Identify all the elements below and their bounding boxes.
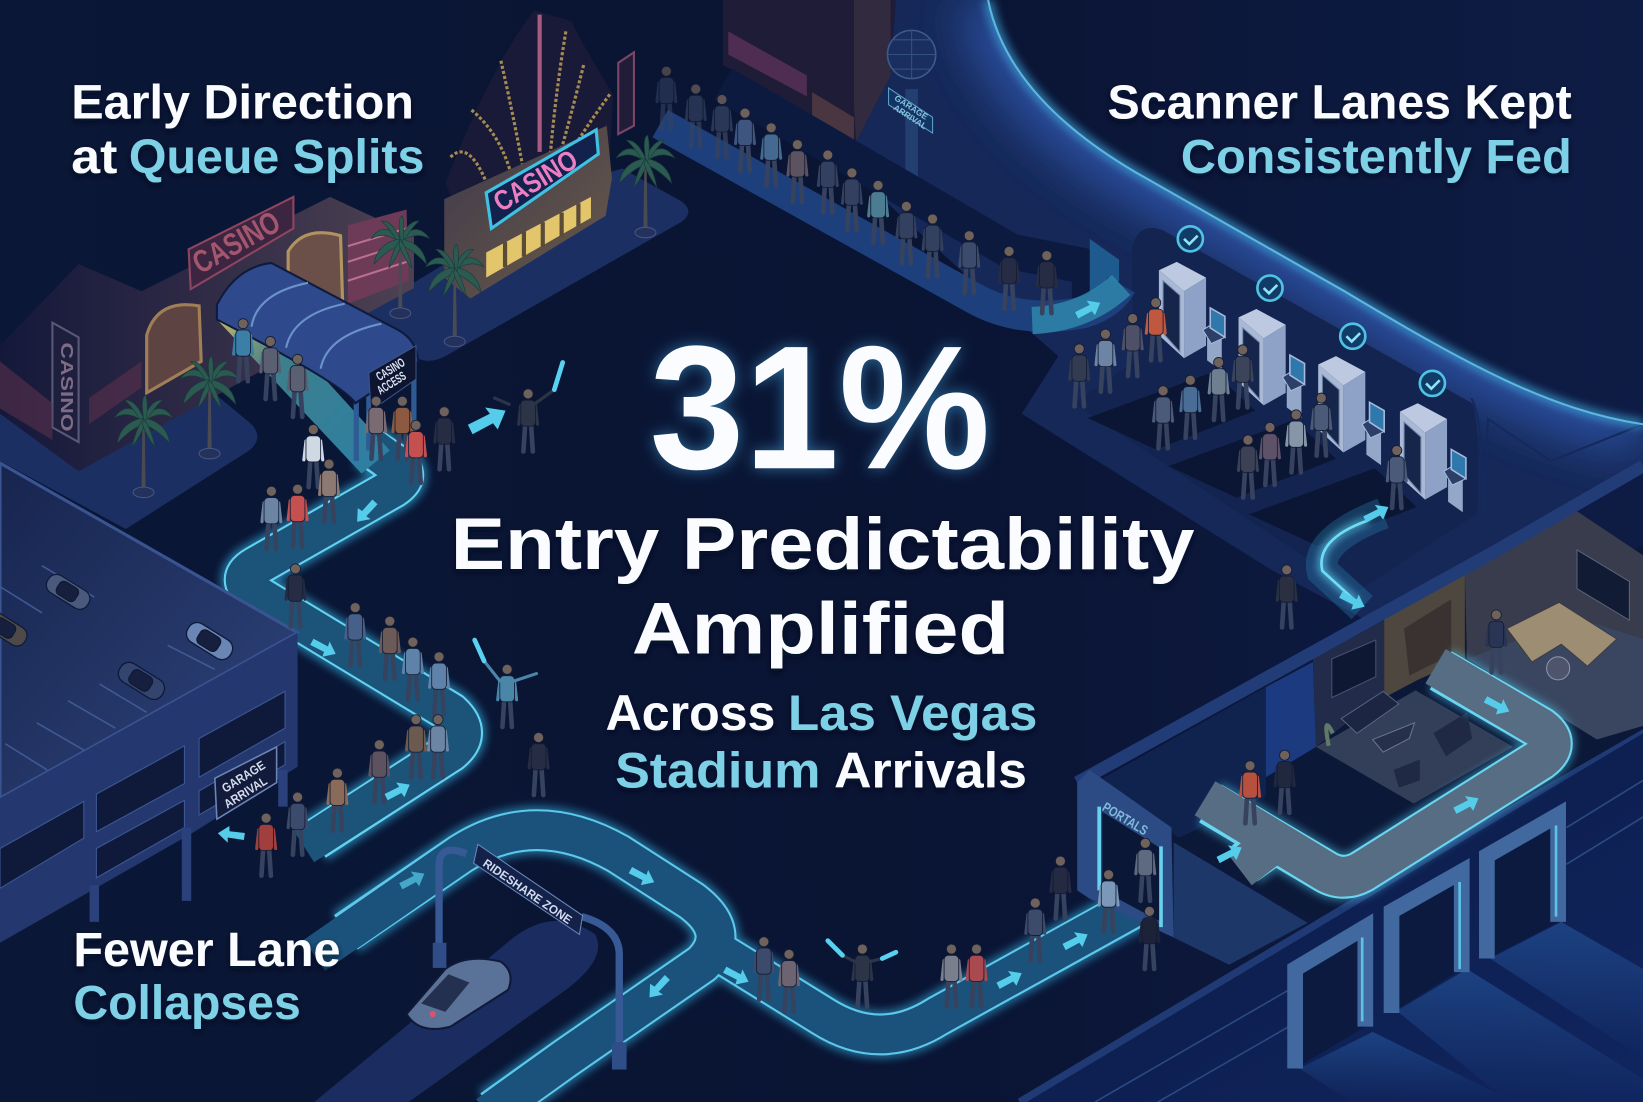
heading: early direction at queue splits: at bbox=[71, 130, 117, 184]
icon: portal arches bbox=[1295, 815, 1558, 1068]
heading: scanner lanes kept consistently fed: Consistently Fed bbox=[1181, 130, 1572, 184]
panel: parking garage bbox=[0, 463, 298, 943]
wall cap bbox=[1077, 466, 1643, 783]
title: 31% statistic: 31% bbox=[650, 310, 990, 506]
icon: lounge furniture bbox=[1326, 602, 1617, 788]
wall segments bbox=[1102, 687, 1266, 838]
lane: casino queue bbox=[245, 440, 462, 846]
panel: top street buildings bbox=[723, 0, 936, 178]
heading: scanner lanes kept consistently fed: Scanner Lanes Kept bbox=[1108, 75, 1572, 129]
panel: scanner hall wall and floor bbox=[856, 0, 1643, 618]
heading: fewer lane collapses: Collapses bbox=[73, 976, 301, 1030]
cars bbox=[0, 571, 236, 703]
heading: early direction at queue splits: Early Direction bbox=[71, 75, 414, 129]
icon: car bbox=[407, 959, 511, 1029]
subtitle: across las vegas stadium arrivals bbox=[606, 684, 1037, 799]
title: entry predictability amplified bbox=[451, 503, 1195, 670]
people: guides with wands bbox=[475, 362, 896, 1007]
people: portal approach bbox=[754, 565, 1506, 1012]
people: casino access queue bbox=[234, 319, 454, 549]
heading: scanner lanes kept consistently fed bbox=[1108, 75, 1572, 184]
sign: main casino neon: CASINO bbox=[487, 143, 583, 218]
panel: rideshare car bay and arch bbox=[314, 844, 627, 1102]
subtitle: across las vegas stadium arrivals: Las Vegas bbox=[788, 684, 1037, 741]
lane: top street queue bbox=[660, 84, 1121, 321]
panel: left casino buildings bbox=[0, 197, 414, 471]
heading: fewer lane collapses bbox=[73, 923, 341, 1030]
panel: canopy bbox=[217, 263, 418, 473]
panel: portals entrance bbox=[1077, 770, 1308, 965]
icon: globe sign: GARAGE bbox=[893, 93, 930, 122]
sign: vertical casino bbox=[52, 323, 79, 442]
icon: rideshare arch bbox=[433, 850, 627, 1070]
light beams bbox=[1299, 922, 1643, 1102]
people: scanner lanes bbox=[1070, 298, 1406, 508]
panel: lower right floor and boundary wall bbox=[1020, 729, 1643, 1102]
subtitle: across las vegas stadium arrivals: Arrivals bbox=[834, 742, 1027, 799]
lane: rideshare loop and portal approach bbox=[314, 830, 1142, 1102]
people: top street queue bbox=[657, 66, 1056, 313]
icon: globe sign bbox=[888, 30, 936, 178]
arrows: direction markers bbox=[217, 301, 1511, 999]
heading: fewer lane collapses: Fewer Lane bbox=[73, 923, 341, 977]
panel: casino sidewalks bbox=[0, 169, 688, 529]
sign: left casino: CASINO bbox=[187, 204, 286, 281]
sign: rideshare zone: RIDESHARE ZONE bbox=[480, 856, 575, 927]
title: entry predictability amplified: Amplified bbox=[632, 588, 1009, 670]
lane: lounge pathway bbox=[1205, 666, 1551, 877]
sign: garage arrival: ARRIVAL bbox=[222, 774, 270, 811]
panel: lounge room bbox=[1077, 466, 1643, 920]
panel: scanner gates bbox=[1159, 262, 1466, 512]
icons: check badges bbox=[1178, 226, 1445, 396]
people: garage queue bbox=[257, 564, 448, 876]
sign: casino access: ACCESS bbox=[375, 369, 409, 397]
heading: early direction at queue splits: Queue Splits bbox=[129, 130, 424, 184]
panel: main casino building bbox=[444, 10, 634, 299]
heading: early direction at queue splits bbox=[71, 75, 424, 184]
glow line on hall wall bbox=[988, 0, 1643, 424]
sign: casino access bbox=[369, 346, 416, 411]
icon: art deco fan bbox=[445, 10, 613, 241]
sign: garage arrival bbox=[215, 747, 277, 819]
subtitle: across las vegas stadium arrivals: Stadium bbox=[615, 742, 820, 799]
title: entry predictability amplified: Entry Predictability bbox=[451, 503, 1195, 585]
panel: portals entrance: PORTALS bbox=[1100, 799, 1151, 838]
icon: palm trees bbox=[114, 135, 675, 498]
lane: curved scanner exit bbox=[1321, 513, 1383, 608]
subtitle: across las vegas stadium arrivals: Across bbox=[606, 684, 775, 741]
sign: garage arrival: GARAGE bbox=[219, 758, 268, 796]
icon: globe sign: ARRIVAL bbox=[892, 102, 929, 131]
sign: casino access: CASINO bbox=[373, 355, 408, 384]
sign: vertical casino: CASINO bbox=[57, 343, 77, 432]
